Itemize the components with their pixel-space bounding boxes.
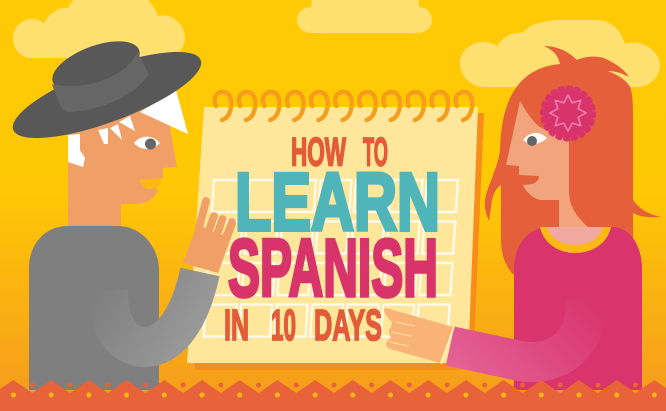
hat crown top [46, 31, 146, 101]
title line: in 10 days [224, 301, 382, 350]
title [224, 130, 440, 350]
title line: spanish: SPANISH [228, 223, 438, 314]
hat brim [4, 35, 210, 155]
man hand [183, 201, 236, 273]
woman collar [540, 227, 611, 253]
title line: in 10 days: DAYS [314, 301, 382, 350]
woman [384, 46, 662, 390]
man neck and face [68, 90, 177, 235]
calendar shadow [195, 113, 484, 370]
man eye [134, 137, 160, 150]
cloud: left [13, 0, 185, 58]
bottom zigzag border [0, 380, 666, 411]
title line: how to: HOW [291, 130, 346, 174]
title line: learn: LEARN [235, 157, 440, 248]
woman flower [542, 88, 594, 139]
calendar page [187, 107, 478, 363]
border dots: red [30, 382, 638, 388]
woman hand [384, 308, 454, 364]
woman eye [523, 133, 547, 146]
woman neckline [547, 227, 603, 245]
woman hair [485, 46, 662, 275]
hat band [52, 52, 149, 112]
woman torso [514, 227, 642, 390]
calendar rings [215, 92, 472, 120]
man torso [29, 226, 159, 390]
border dots: yellow [11, 392, 657, 398]
man mouth [139, 178, 163, 189]
title line: in 10 days: IN [224, 301, 249, 350]
cloud: right [460, 20, 660, 87]
title line: in 10 days: 10 [271, 301, 296, 350]
man [4, 31, 236, 390]
woman arm [450, 298, 586, 362]
title: TO [363, 130, 388, 174]
calendar [187, 92, 484, 370]
cloud: top centre [297, 0, 432, 33]
man arm [108, 272, 200, 347]
man hat [4, 31, 210, 155]
calendar grid [204, 180, 458, 336]
man hair [68, 90, 188, 167]
woman face and neck [506, 101, 588, 227]
